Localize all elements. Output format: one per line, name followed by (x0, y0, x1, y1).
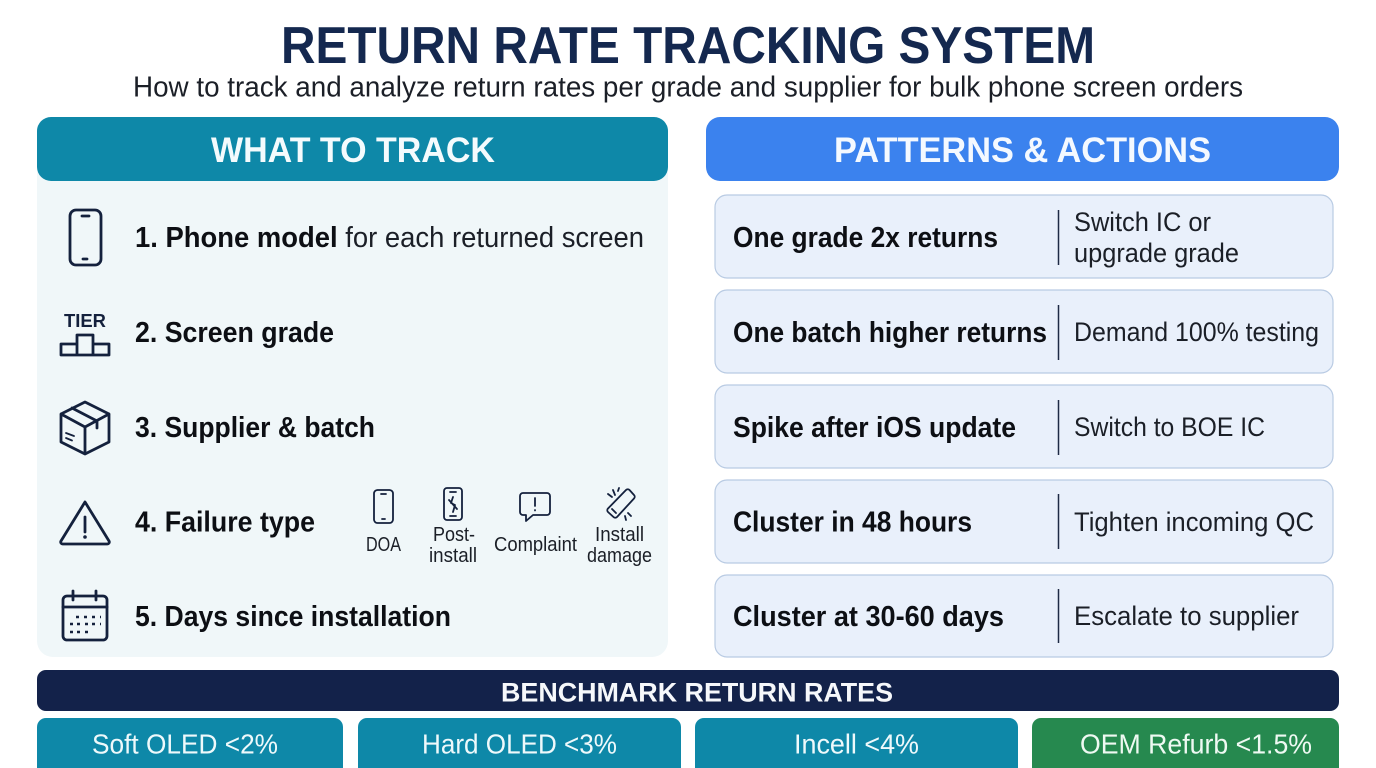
row 1: phone model (70, 210, 644, 265)
pattern row 5: Cluster at 30-60 days (733, 601, 1004, 633)
failure type: DOA: DOA (366, 534, 402, 556)
failure type: install damage: Install (595, 524, 644, 546)
pattern row 1: Switch IC or (1074, 207, 1211, 237)
icon: calendar (63, 591, 107, 640)
row 5: days since installation (63, 591, 451, 640)
pattern row 1 (715, 195, 1333, 278)
panel header: WHAT TO TRACK (211, 131, 495, 170)
benchmark heading bar: BENCHMARK RETURN RATES (501, 678, 893, 708)
benchmark: soft OLED: Soft OLED <2% (92, 728, 278, 760)
failure type: install damage (587, 488, 652, 567)
pattern row 4: Tighten incoming QC (1074, 507, 1314, 537)
pattern row 3: Switch to BOE IC (1074, 412, 1265, 442)
pattern row 4: Cluster in 48 hours (733, 506, 972, 538)
icon: tier podium (61, 310, 109, 355)
pattern row 2: One batch higher returns (733, 317, 1047, 349)
row 2: screen grade (61, 310, 334, 355)
pattern row 3: Spike after iOS update (733, 412, 1016, 444)
pattern row 5 (715, 575, 1333, 657)
benchmark heading bar (37, 670, 1339, 711)
failure type: DOA (366, 490, 402, 556)
failure type: post-install: install (429, 545, 477, 567)
icon: tier podium: TIER (64, 310, 106, 331)
benchmark: OEM refurb (1032, 718, 1339, 768)
row 5: days since installation: 5. Days since installation (135, 601, 451, 633)
icon: warning triangle (61, 502, 109, 544)
benchmark: hard OLED: Hard OLED <3% (422, 728, 617, 760)
failure type: complaint (494, 493, 577, 556)
pattern row 1: upgrade grade (1074, 238, 1239, 268)
benchmark: incell: Incell <4% (794, 728, 919, 760)
pattern row 4 (715, 480, 1333, 563)
failure type: install damage: damage (587, 545, 652, 567)
pattern row 2: Demand 100% testing (1074, 317, 1319, 347)
benchmark: soft OLED (37, 718, 343, 768)
failure type: post-install (429, 488, 477, 567)
row 2: screen grade: 2. Screen grade (135, 317, 334, 349)
row 3: supplier and batch (61, 402, 375, 454)
subtitle: How to track and analyze return rates per grade and supplier for bulk phone screen orders (133, 72, 1243, 104)
benchmark: hard OLED (358, 718, 681, 768)
row 4: failure type: 4. Failure type (135, 506, 315, 538)
panel header (706, 117, 1339, 181)
icon: box (61, 402, 109, 454)
failure type: post-install: Post- (433, 524, 475, 546)
panel body (37, 170, 668, 657)
panel: patterns and actions (706, 117, 1339, 657)
row 3: supplier and batch: 3. Supplier & batch (135, 412, 375, 444)
row 1: phone model: 1. Phone model for each returned screen (135, 222, 644, 254)
pattern row 3 (715, 385, 1333, 468)
title: RETURN RATE TRACKING SYSTEM (281, 17, 1095, 75)
benchmark: OEM refurb: OEM Refurb <1.5% (1080, 728, 1312, 760)
pattern row 1: One grade 2x returns (733, 222, 998, 254)
pattern row 2 (715, 290, 1333, 373)
panel header: PATTERNS & ACTIONS (834, 131, 1211, 170)
icon: phone (70, 210, 101, 265)
panel header (37, 117, 668, 181)
benchmark: incell (695, 718, 1018, 768)
failure type: complaint: Complaint (494, 534, 577, 556)
row 4: failure type (61, 488, 652, 567)
pattern row 5: Escalate to supplier (1074, 601, 1299, 631)
panel: what to track (37, 117, 668, 657)
